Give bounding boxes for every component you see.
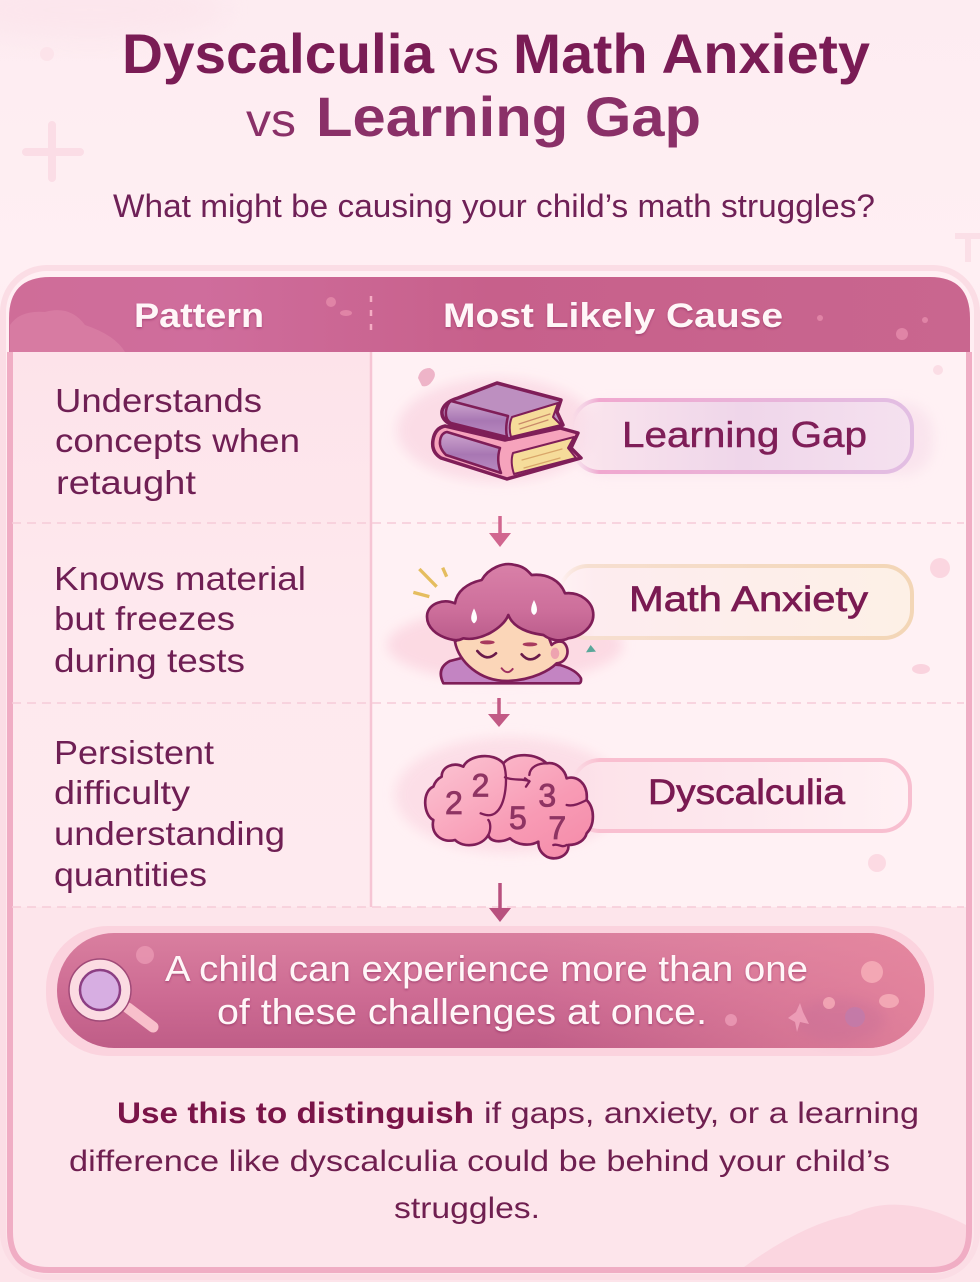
cause pill: Learning Gap: Learning Gap <box>622 414 867 455</box>
closing note: Use this to distinguish <box>117 1097 474 1130</box>
face <box>455 612 568 681</box>
row 2 pattern text: during tests <box>54 642 245 679</box>
icon: anxious child <box>413 564 596 683</box>
row 3 pattern text: quantities <box>54 856 207 893</box>
icon: magnifying glass <box>69 959 153 1027</box>
title: Dyscalculia <box>122 22 435 85</box>
brain numbers: 7 <box>548 810 566 846</box>
bottom book <box>433 426 581 479</box>
title <box>122 22 870 148</box>
brain numbers: 2 <box>445 785 463 821</box>
brain fold lines <box>481 763 587 846</box>
sweat drops <box>471 600 537 623</box>
callout banner <box>46 926 934 1056</box>
brain numbers: 3 <box>538 778 556 814</box>
outer table frame <box>3 268 977 1277</box>
table panel <box>3 268 977 1277</box>
brain numbers <box>445 768 566 846</box>
soft blobs behind icons <box>387 365 950 872</box>
closing note: difference like dyscalculia could be behind your child’s <box>69 1145 890 1178</box>
arrow: table to callout <box>489 883 511 922</box>
subtitle: What might be causing your child’s math struggles? <box>113 188 875 224</box>
brain numbers: 2 <box>472 768 489 804</box>
brain shape <box>425 755 593 858</box>
header: Pattern: Pattern <box>134 297 264 335</box>
table borders <box>370 352 372 907</box>
top book <box>442 383 563 439</box>
callout text <box>165 948 808 1032</box>
row 2 pattern text: but freezes <box>54 600 235 637</box>
stress marks <box>413 568 447 597</box>
right column tint <box>372 352 967 907</box>
row 3 pattern text: difficulty <box>54 774 191 811</box>
callout text: A child can experience more than one <box>165 948 808 989</box>
closing note: struggles. <box>394 1192 540 1225</box>
row 1 pattern text: concepts when <box>55 422 300 459</box>
title: Math Anxiety <box>513 22 870 85</box>
title: vs <box>449 31 499 83</box>
cause pill: Learning Gap <box>572 400 933 475</box>
closing note: if gaps, anxiety, or a learning <box>484 1097 919 1130</box>
lower body floral wash <box>740 1205 966 1270</box>
row 3 pattern text: understanding <box>54 815 285 852</box>
row 2 pattern text: Knows material <box>54 560 306 597</box>
title: vs <box>246 94 296 146</box>
cause pill: Math Anxiety: Math Anxiety <box>629 580 869 619</box>
row 3 pattern text <box>54 734 285 893</box>
cause pill: Math Anxiety <box>560 566 912 638</box>
decorative corner washes <box>0 0 980 262</box>
brain numbers: 5 <box>509 800 527 836</box>
row 1 pattern text: retaught <box>56 464 196 501</box>
left column tint <box>10 352 371 907</box>
shoulders <box>441 657 581 683</box>
hair <box>427 564 593 640</box>
header: Most Likely Cause: Most Likely Cause <box>443 297 783 335</box>
icon: stacked books <box>433 383 581 479</box>
table header <box>9 277 970 352</box>
table body <box>9 352 970 1271</box>
row 3 pattern text: Persistent <box>54 734 214 771</box>
closing note <box>69 1097 919 1225</box>
cause pill: Dyscalculia: Dyscalculia <box>648 773 846 812</box>
row 2 pattern text <box>54 560 306 679</box>
row 1 pattern text <box>55 382 300 501</box>
arrow: row 1 to row 2 <box>489 516 511 547</box>
icon: brain with numbers <box>425 755 593 858</box>
cause pill: Dyscalculia <box>572 760 910 831</box>
title: Learning Gap <box>316 85 701 148</box>
row 1 pattern text: Understands <box>55 382 262 419</box>
arrow: row 2 to row 3 <box>488 698 510 727</box>
callout text: of these challenges at once. <box>217 991 707 1032</box>
